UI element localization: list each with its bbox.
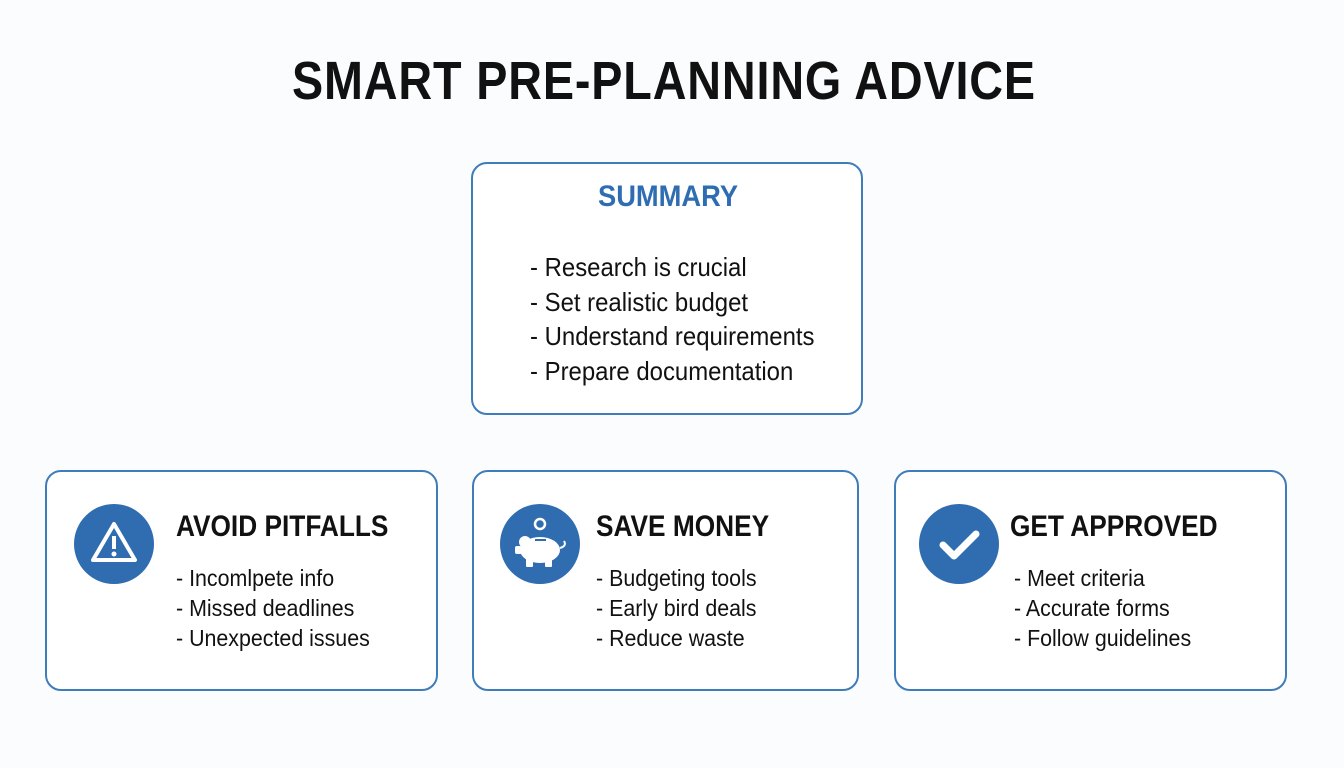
summary list: - Understand requirements [530,321,815,351]
panel: avoid pitfalls [45,470,438,691]
panel: save money [472,470,859,691]
summary list: - Research is crucial [530,252,747,282]
list: - Missed deadlines [176,595,354,621]
list: - Follow guidelines [1014,625,1191,651]
heading: GET APPROVED [1010,510,1218,543]
list [1014,565,1191,651]
list: - Reduce waste [596,625,745,651]
list: - Meet criteria [1014,565,1145,591]
list: - Early bird deals [596,595,756,621]
heading: AVOID PITFALLS [176,510,388,543]
summary list: - Set realistic budget [530,286,748,316]
list: - Budgeting tools [596,565,757,591]
list [176,565,370,651]
icon: warning [74,504,154,584]
list: - Accurate forms [1014,595,1170,621]
list: - Unexpected issues [176,625,370,651]
summary heading: SUMMARY [598,180,738,213]
title: SMART PRE-PLANNING ADVICE [292,51,1036,111]
list: - Incomlpete info [176,565,334,591]
icon: check [919,504,999,584]
list [596,565,757,651]
heading: SAVE MONEY [596,510,769,543]
summary list: - Prepare documentation [530,356,793,386]
summary list [530,252,815,386]
panel: get approved [894,470,1287,691]
panel: summary [471,162,863,415]
icon: piggy bank [500,504,580,584]
